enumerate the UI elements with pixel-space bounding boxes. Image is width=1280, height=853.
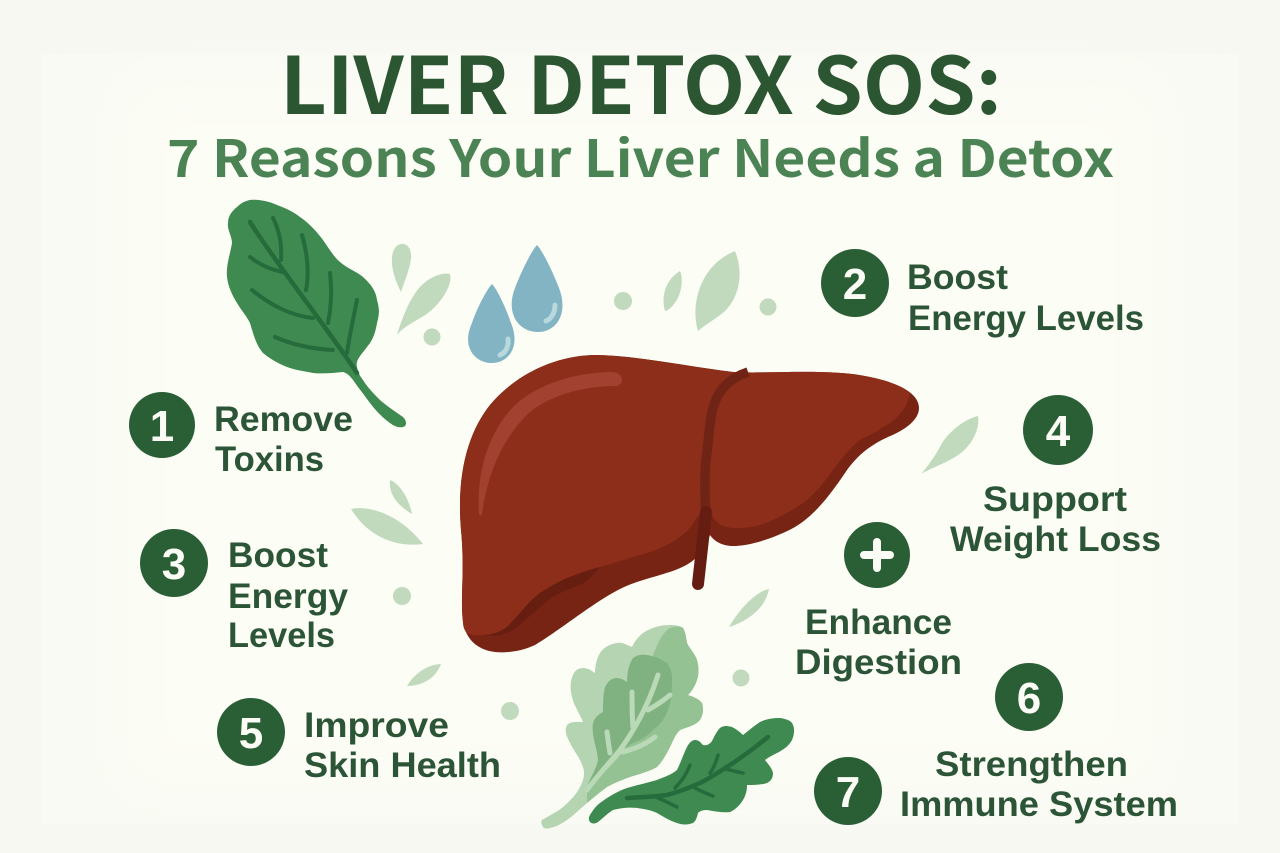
callout 5: improve skin health: Improve bbox=[304, 706, 449, 745]
callout 3: boost energy levels: 3 bbox=[162, 540, 186, 589]
icon: large spinach leaf bbox=[227, 200, 406, 427]
callout 1: remove toxins bbox=[129, 392, 353, 479]
callout 1: remove toxins: Toxins bbox=[215, 440, 324, 479]
icon: dark oak-style leaf bbox=[589, 718, 794, 824]
callout 4: support weight loss: Support bbox=[983, 480, 1127, 519]
callout 2: boost energy levels: 2 bbox=[843, 260, 867, 309]
callout 3: boost energy levels bbox=[140, 529, 349, 655]
callout 6: number six bbox=[995, 663, 1063, 731]
callout 1: remove toxins: Remove bbox=[214, 400, 353, 439]
icon: left small leaves and dots bbox=[351, 480, 769, 720]
callout 5: improve skin health: 5 bbox=[239, 709, 263, 758]
callout 4: support weight loss bbox=[950, 395, 1161, 559]
callout 4: support weight loss: 4 bbox=[1046, 407, 1071, 456]
callout 2: boost energy levels bbox=[821, 249, 1144, 338]
icon: pale lettuce leaf bbox=[541, 625, 703, 829]
callout 5: improve skin health: Skin Health bbox=[304, 746, 501, 785]
callout 1: remove toxins: 1 bbox=[150, 402, 174, 451]
callout 7: strengthen immune system bbox=[814, 745, 1178, 825]
callout 3: boost energy levels: Levels bbox=[228, 616, 335, 655]
callout plus: enhance digestion bbox=[795, 522, 962, 682]
callout plus: enhance digestion: Digestion bbox=[795, 643, 962, 682]
icon: liver bbox=[460, 355, 919, 652]
subtitle: 7 Reasons Your Liver Needs a Detox bbox=[167, 118, 1114, 192]
callout 7: strengthen immune system: Immune System bbox=[900, 785, 1178, 824]
callout 5: improve skin health bbox=[217, 698, 501, 785]
icon: leaf near number 4 bbox=[921, 416, 978, 474]
callout 6: number six: 6 bbox=[1017, 674, 1041, 723]
callout 2: boost energy levels: Energy Levels bbox=[908, 299, 1144, 338]
callout 3: boost energy levels: Boost bbox=[228, 536, 328, 575]
callout 2: boost energy levels: Boost bbox=[907, 258, 1008, 297]
callout 7: strengthen immune system: Strengthen bbox=[935, 745, 1128, 784]
callout 3: boost energy levels: Energy bbox=[228, 577, 349, 616]
callout 4: support weight loss: Weight Loss bbox=[950, 520, 1161, 559]
callout 7: strengthen immune system: 7 bbox=[836, 768, 860, 817]
icon: small pale leaves bbox=[392, 244, 450, 346]
icon: leaves and dots above liver bbox=[614, 251, 776, 331]
callout plus: enhance digestion: Enhance bbox=[805, 603, 952, 642]
icon: water drops bbox=[468, 245, 562, 363]
title: LIVER DETOX SOS: bbox=[280, 22, 1002, 137]
